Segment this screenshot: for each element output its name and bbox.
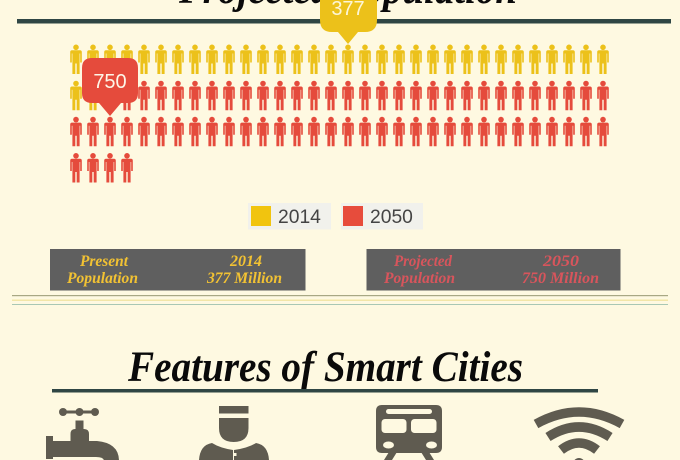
legend item: 2014: 2014 bbox=[278, 207, 321, 228]
icon: train bbox=[376, 405, 442, 460]
panel: present population bbox=[50, 249, 306, 290]
panel: present population: Population bbox=[66, 270, 138, 287]
panel: present population: 377 Million bbox=[206, 270, 282, 287]
panel: present population: 2014 bbox=[229, 253, 262, 270]
panel: projected population: Projected bbox=[393, 253, 453, 270]
panel: projected population bbox=[366, 249, 620, 290]
legend item: 2014 bbox=[248, 203, 331, 230]
pictogram: rows 2 to 4, 2050 population bbox=[70, 81, 609, 182]
icon: bellhop bbox=[199, 406, 269, 460]
icon: water tap bbox=[46, 408, 119, 460]
panel: present population: Present bbox=[79, 253, 129, 270]
legend item: 2050: 2050 bbox=[370, 207, 413, 228]
panel: projected population: Population bbox=[383, 270, 455, 287]
pictogram: row 1, 2014 population bbox=[70, 44, 609, 110]
icon: wifi bbox=[536, 412, 622, 460]
callout: 750 bbox=[82, 58, 138, 116]
heading: Features of Smart Cities: Features of Smart Cities bbox=[127, 344, 523, 391]
panel: projected population: 2050 bbox=[542, 253, 579, 270]
callout: 750: 750 bbox=[93, 71, 127, 93]
panel: projected population: 750 Million bbox=[522, 270, 599, 287]
legend item: 2050 bbox=[341, 203, 423, 230]
callout: 377 bbox=[320, 0, 377, 44]
